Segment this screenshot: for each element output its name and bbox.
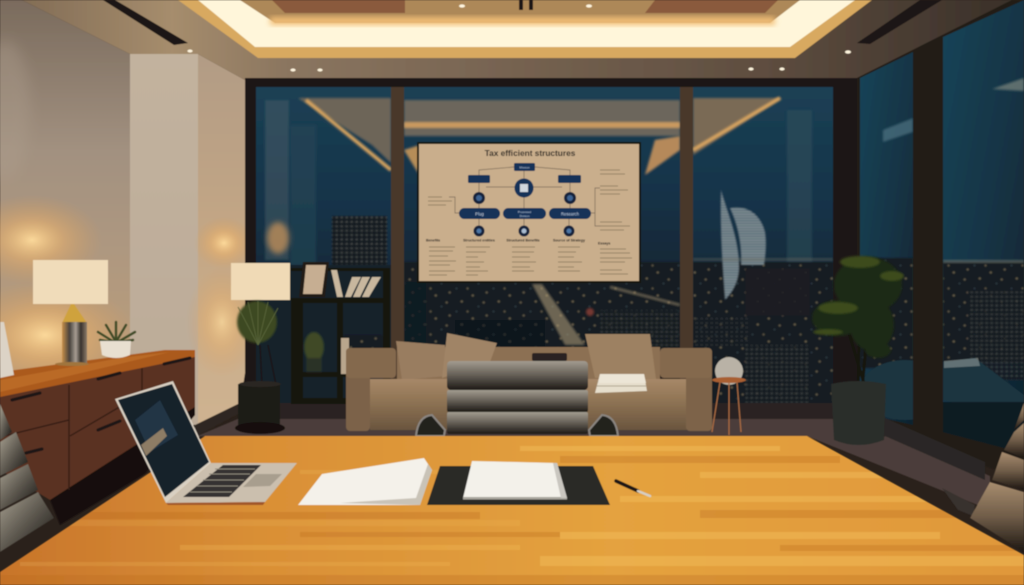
- poster: [417, 142, 641, 283]
- poster top pill: [514, 163, 535, 171]
- right wall frame: [857, 0, 1024, 480]
- table top: [0, 436, 1024, 585]
- poster column headings: [426, 238, 610, 246]
- floor lamp right: [231, 263, 290, 434]
- sideboard: [0, 350, 195, 525]
- corner window two: [943, 0, 1024, 457]
- small plant: [304, 332, 324, 372]
- plant pot: [831, 381, 886, 445]
- open document: [298, 458, 432, 505]
- floor: [195, 403, 990, 516]
- shelf unit: [291, 262, 391, 404]
- ceiling: [22, 0, 1012, 87]
- book stack: [341, 338, 349, 374]
- poster main pills: Processed: [518, 210, 532, 214]
- window column frames: [391, 87, 693, 403]
- city below the poster: [404, 262, 680, 357]
- leather pad: [427, 466, 610, 505]
- poster main pills: Research: [561, 212, 580, 216]
- ceiling cove lip: [178, 0, 872, 58]
- sofa cushions: [396, 341, 447, 380]
- right chair: [970, 403, 1024, 552]
- pen: [616, 481, 650, 496]
- dark tower: [332, 216, 388, 266]
- poster text lines: [428, 170, 632, 275]
- spiral tower: [730, 207, 766, 265]
- right baseboard: [885, 418, 985, 480]
- sideboard handles: [12, 358, 190, 453]
- picture frame: [299, 262, 329, 297]
- left wall: [0, 0, 135, 430]
- ceiling panel right: [645, 0, 778, 13]
- poster column headings: Structured Benefits: [506, 238, 540, 242]
- ceiling panel left: [272, 0, 405, 13]
- photo frame on sideboard: [0, 322, 14, 378]
- window right of centre: [693, 87, 833, 403]
- poster title: Tax efficient structures: [485, 148, 576, 158]
- large plant: [812, 256, 904, 445]
- sofa arms: [346, 348, 370, 431]
- poster upper icons: [473, 192, 576, 204]
- poster column headings: Benefits: [426, 238, 440, 242]
- poster top pill: Mission: [519, 166, 530, 170]
- poster column headings: Essays: [598, 242, 610, 246]
- wall pillar: [130, 54, 258, 437]
- vent right: [857, 0, 942, 44]
- poster column headings: Source of Strategy: [553, 238, 585, 242]
- sofa seats: [370, 379, 450, 430]
- touchpad: [243, 474, 282, 487]
- sofa book stack: [595, 374, 647, 393]
- ceiling recess: [198, 0, 855, 47]
- poster connectors: [449, 167, 600, 226]
- centre vent: [519, 0, 533, 10]
- poster main pills: Division: [520, 214, 530, 218]
- poster side pills: [468, 175, 581, 183]
- side table with mirror: [712, 357, 746, 435]
- table lamp left: [33, 260, 108, 366]
- laptop: [115, 381, 297, 505]
- corner window one: [859, 52, 914, 425]
- sofa: [346, 333, 712, 431]
- window left: [256, 87, 391, 403]
- poster lower icons: [474, 226, 574, 236]
- downlights: [187, 4, 851, 71]
- notebook: [463, 461, 567, 500]
- books: [331, 270, 381, 297]
- window centre: [404, 87, 680, 357]
- poster centre icon: [514, 178, 534, 198]
- centre chair: [416, 361, 618, 436]
- ceiling reflection: [298, 98, 391, 163]
- poster main pills: [459, 208, 591, 219]
- left chair: [0, 404, 54, 552]
- potted plant on sideboard: [98, 322, 135, 358]
- poster column headings: Structured entities: [463, 238, 495, 242]
- keyboard: [183, 465, 261, 497]
- window wall frame: [245, 80, 857, 420]
- vent left: [103, 0, 188, 45]
- poster main pills: Plug: [475, 212, 484, 216]
